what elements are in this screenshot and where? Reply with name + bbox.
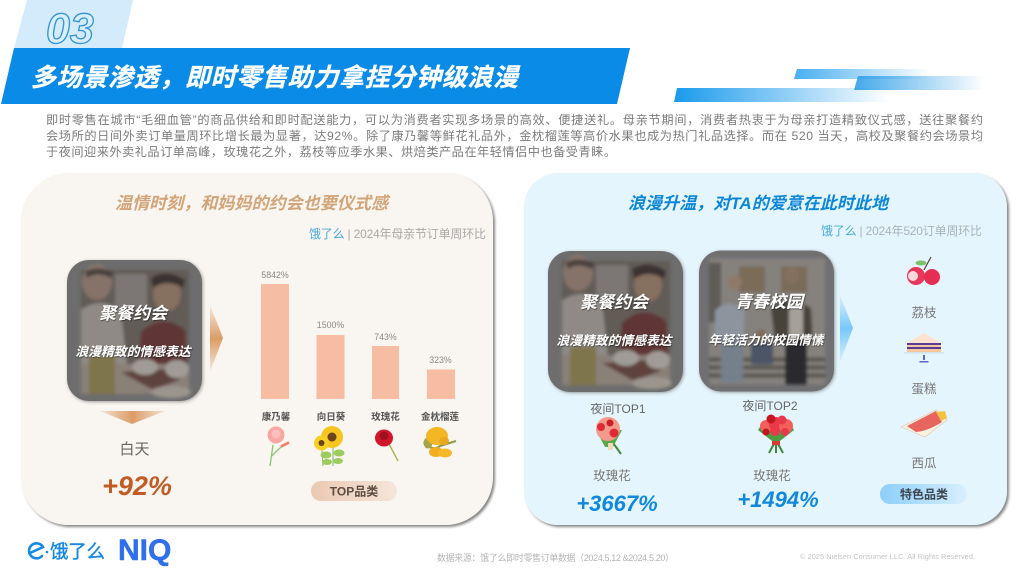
panel heading: 浪漫升温，对TA的爱意在此时此地 — [628, 194, 890, 213]
bar chart: top categories: 743% — [374, 332, 397, 342]
pill: featured categories: 特色品类 — [900, 486, 948, 502]
photo card: campus: 青春校园 — [735, 292, 806, 312]
photo card: dining date: 浪漫精致的情感表达 — [75, 344, 193, 359]
icon: carnation — [268, 426, 288, 466]
night top 2: +1494% — [737, 487, 819, 512]
daytime label: 白天 — [119, 441, 150, 458]
photo card: campus — [699, 250, 834, 392]
arrow right — [210, 305, 223, 372]
bar chart: top categories: 5842% — [261, 270, 289, 280]
section number 03: 03 — [46, 5, 94, 53]
photo card: dining date — [548, 251, 683, 392]
icon: bouquet small — [596, 417, 622, 454]
icon: bouquet large — [758, 414, 794, 453]
icon: sunflower — [314, 426, 344, 466]
panel heading: 温情时刻，和妈妈的约会也要仪式感 — [115, 194, 391, 213]
data source note: 饿了么 | 2024年520订单周环比 — [821, 224, 982, 238]
logo: Ele.me: 饿了么 — [50, 541, 105, 562]
icon: watermelon — [901, 410, 947, 437]
label: watermelon: 西瓜 — [911, 456, 937, 470]
arrow right — [840, 295, 853, 362]
copyright: © 2025 Nielsen Consumer LLC. All Rights Reserved. — [800, 552, 975, 561]
panel: 520 — [524, 173, 1007, 525]
title text: 多场景渗透，即时零售助力拿捏分钟级浪漫 — [31, 64, 521, 92]
title banner — [1, 48, 630, 104]
panel: Mother's Day — [21, 173, 493, 525]
night top 1: 玫瑰花 — [593, 468, 631, 483]
bar chart: top categories: 1500% — [317, 320, 344, 330]
pill: featured categories — [880, 484, 967, 504]
data source footer: 数据来源：饿了么即时零售订单数据（2024.5.12 &2024.5.20） — [437, 552, 674, 563]
label: lychee: 荔枝 — [911, 305, 937, 320]
photo card: dining date — [67, 260, 202, 401]
section number tab — [14, 0, 133, 53]
daytime growth value: +92% — [102, 471, 172, 501]
icon: rose — [375, 430, 398, 461]
intro paragraph — [46, 112, 983, 159]
arrow down — [100, 411, 165, 424]
pill: top categories: TOP品类 — [330, 484, 378, 498]
night top 2: 夜间TOP2 — [742, 398, 798, 413]
night top 1: 夜间TOP1 — [590, 401, 646, 416]
icon: cake — [904, 333, 944, 362]
icon: durian — [424, 427, 456, 458]
photo card: campus: 年轻活力的校园情愫 — [708, 332, 826, 348]
pill: top categories — [311, 481, 397, 501]
intro paragraph: 于夜间迎来外卖礼品订单高峰，玫瑰花之外，荔枝等应季水果、烘焙类产品在年轻情侣中也备受青睐。 — [46, 144, 616, 159]
bar chart: top categories: 向日葵 — [317, 411, 346, 423]
icon: lychee — [907, 257, 940, 285]
night top 1 — [576, 401, 658, 516]
bar chart: top categories — [261, 270, 459, 423]
night top 2 — [737, 398, 819, 512]
data source note: 饿了么 | 2024年母亲节订单周环比 — [309, 227, 486, 241]
bar chart: top categories: 康乃馨 — [262, 411, 291, 423]
photo card: dining date: 聚餐约会 — [99, 304, 169, 323]
night top 2: 玫瑰花 — [753, 468, 791, 483]
decorative header stripes — [674, 69, 985, 102]
intro paragraph: 即时零售在城市“毛细血管”的商品供给和即时配送能力，可以为消费者实现多场景的高效、便捷送礼。母亲节期间，消费者热衷于为母亲打造精致仪式感，送往聚餐约 — [46, 112, 983, 127]
logo: NIQ: NIQ — [118, 534, 171, 567]
photo card: dining date: 浪漫精致的情感表达 — [556, 333, 674, 348]
bar chart: top categories: 金枕榴莲 — [421, 411, 459, 423]
bar chart: top categories: 323% — [429, 355, 452, 365]
night top 1: +3667% — [576, 491, 658, 516]
intro paragraph: 会场所的日间外卖订单量周环比增长最为显著，达92%。除了康乃馨等鲜花礼品外，金枕榴莲等高价水果也成为热门礼品选择。而在 520 当天，高校及聚餐约会场景均 — [46, 128, 983, 143]
label: cake: 蛋糕 — [911, 382, 937, 396]
photo card: dining date: 聚餐约会 — [580, 293, 650, 312]
bar chart: top categories: 玫瑰花 — [371, 411, 400, 423]
